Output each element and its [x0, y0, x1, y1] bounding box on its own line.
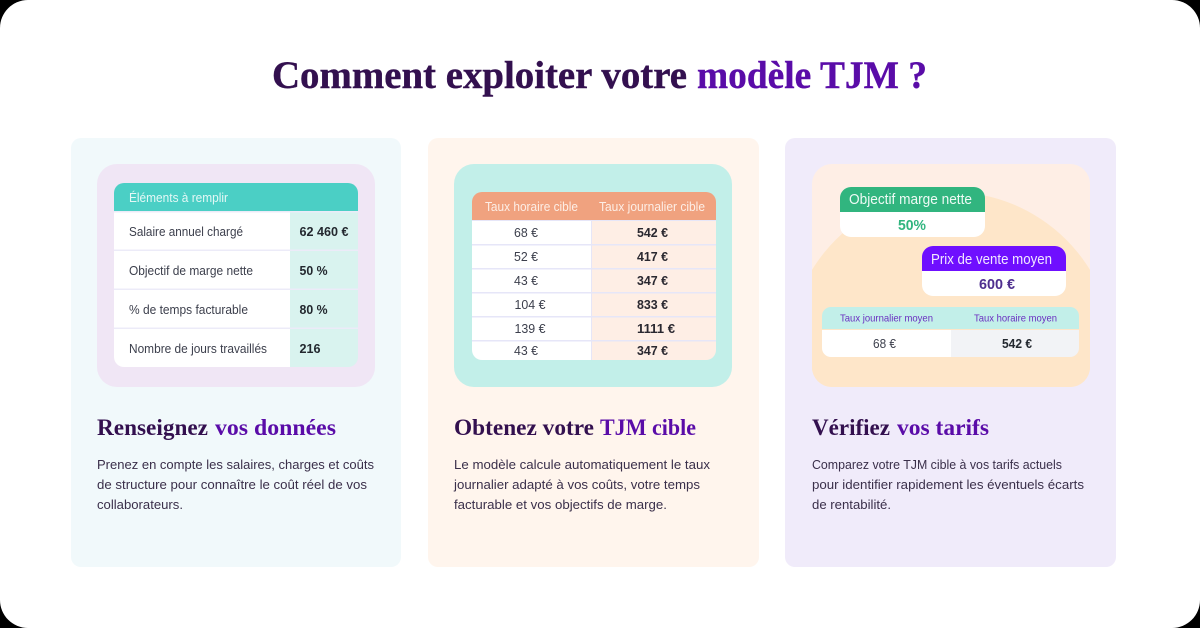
- text: description données: [97, 457, 374, 512]
- table: taux moyens: 68 €: [873, 337, 896, 351]
- heading: obtenez votre TJM cible: Obtenez votre: [454, 415, 594, 440]
- table: éléments à remplir: % de temps facturable: [129, 302, 248, 317]
- table: taux cibles: 542 €: [637, 226, 668, 240]
- table: taux cibles: 347 €: [637, 274, 668, 288]
- title: [272, 54, 927, 97]
- table: taux moyens: Taux journalier moyen: [840, 312, 933, 324]
- table: taux moyens: 542 €: [1002, 337, 1032, 351]
- table: éléments à remplir: Nombre de jours travaillés: [129, 341, 267, 356]
- text: description données: collaborateurs.: [97, 497, 183, 512]
- heading: vérifiez vos tarifs: [812, 415, 989, 440]
- table: taux cibles: 43 €: [514, 344, 538, 358]
- table: taux cibles: 1111 €: [637, 322, 675, 336]
- table: éléments à remplir: Éléments à remplir: [129, 190, 229, 205]
- pill: prix de vente moyen: Prix de vente moyen: [931, 252, 1052, 268]
- table: taux cibles: 139 €: [514, 322, 546, 336]
- panel: obtenez votre TJM cible: [428, 138, 759, 567]
- text: description tarifs: de rentabilité.: [812, 497, 891, 512]
- text: description tarifs: pour identifier rapidement les éventuels écarts: [812, 477, 1084, 492]
- table: éléments à remplir: 50 %: [300, 263, 328, 278]
- heading: vérifiez vos tarifs: Vérifiez: [812, 415, 890, 440]
- text: description tarifs: [812, 457, 1084, 512]
- pill: prix de vente moyen: 600 €: [979, 277, 1015, 293]
- text: description TJM: facturable et vos objectifs de marge.: [454, 497, 667, 512]
- text: description données: Prenez en compte les salaires, charges et coûts: [97, 457, 374, 472]
- table: taux cibles: 52 €: [514, 250, 538, 264]
- table: taux moyens: [822, 307, 1079, 357]
- table: taux cibles: [472, 192, 716, 360]
- pill: objectif marge nette: [840, 187, 985, 237]
- text: description TJM: Le modèle calcule automatiquement le taux: [454, 457, 711, 472]
- heading: renseignez vos données: vos données: [215, 415, 336, 440]
- table: éléments à remplir: 80 %: [300, 302, 328, 317]
- panel: vérifiez vos tarifs: [785, 138, 1116, 567]
- pill: objectif marge nette: Objectif marge nette: [849, 192, 972, 208]
- table: taux cibles: Taux journalier cible: [599, 200, 705, 214]
- table: éléments à remplir: Objectif de marge nette: [129, 263, 253, 278]
- heading: renseignez vos données: [97, 415, 336, 440]
- heading: obtenez votre TJM cible: TJM cible: [600, 415, 696, 440]
- title: Comment exploiter votre: [272, 54, 687, 97]
- text: description données: de structure pour connaître le coût réel de vos: [97, 477, 367, 492]
- table: taux cibles: 104 €: [514, 298, 546, 312]
- table: éléments à remplir: [114, 183, 358, 367]
- table: taux cibles: 417 €: [637, 250, 668, 264]
- heading: renseignez vos données: Renseignez: [97, 415, 208, 440]
- table: taux cibles: 68 €: [514, 226, 538, 240]
- heading: vérifiez vos tarifs: vos tarifs: [897, 415, 989, 440]
- table: taux moyens: Taux horaire moyen: [974, 312, 1057, 324]
- table: taux cibles: 43 €: [514, 274, 538, 288]
- pill: objectif marge nette: 50%: [898, 218, 926, 234]
- text: description TJM: journalier adapté à vos coûts, votre temps: [453, 477, 701, 492]
- table: taux cibles: 833 €: [637, 298, 668, 312]
- table: taux cibles: 347 €: [637, 344, 668, 358]
- table: éléments à remplir: 62 460 €: [300, 224, 348, 239]
- heading: obtenez votre TJM cible: [454, 415, 696, 440]
- table: éléments à remplir: 216: [300, 341, 320, 356]
- text: description tarifs: Comparez votre TJM cible à vos tarifs actuels: [812, 457, 1062, 472]
- table: taux cibles: Taux horaire cible: [485, 200, 578, 214]
- panel: renseignez vos données: [71, 138, 401, 567]
- title: modèle TJM ?: [697, 54, 927, 97]
- table: éléments à remplir: Salaire annuel chargé: [129, 224, 243, 239]
- text: description TJM: [453, 457, 711, 512]
- pill: prix de vente moyen: [922, 246, 1066, 296]
